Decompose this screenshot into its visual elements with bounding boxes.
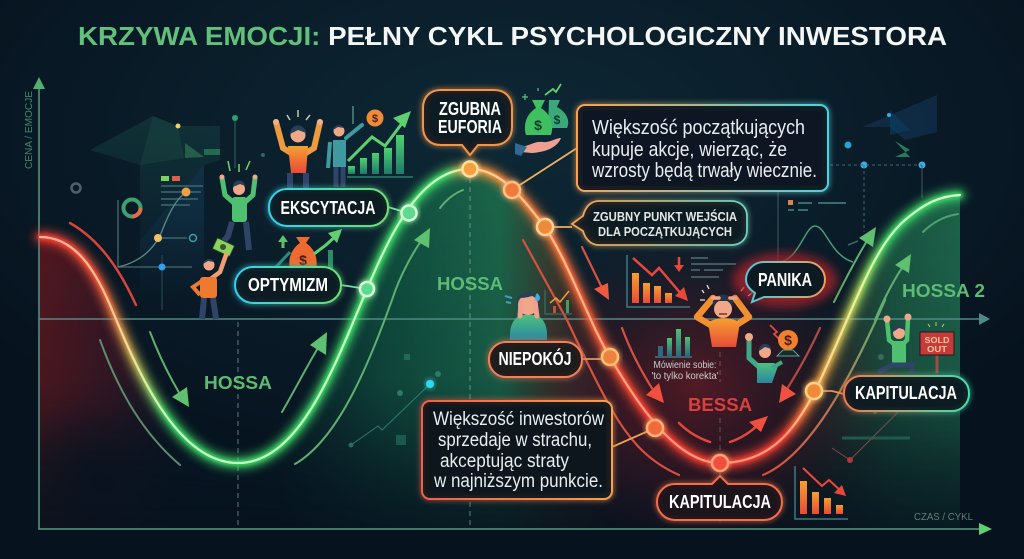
bear market red haze bbox=[510, 230, 880, 540]
label: kapitulacja bottom: KAPITULACJA bbox=[669, 492, 771, 512]
callout: beginners buy: kupuje akcje, wierząc, że bbox=[592, 139, 787, 161]
callout: most investors sell: Większość inwestorów bbox=[433, 409, 604, 430]
axis label: y: CENA / EMOCJE bbox=[24, 91, 35, 169]
callout: most investors sell: sprzedaje w strachu, bbox=[438, 430, 592, 451]
lower-left dark falloff bbox=[2, 402, 198, 558]
icon: investor pointing at growth chart bbox=[328, 106, 413, 187]
phase label: HOSSA 2: HOSSA 2 bbox=[902, 281, 985, 301]
label: panika bbox=[733, 253, 837, 307]
label: ekscytacja bbox=[269, 189, 388, 226]
icon: investor holding banknote bbox=[193, 238, 235, 319]
title: KRZYWA EMOCJI: PEŁNY CYKL PSYCHOLOGICZNY INWESTORA bbox=[78, 21, 947, 51]
label: niepokoj bbox=[489, 342, 582, 377]
icon: money bags in hand: $ bbox=[534, 117, 542, 133]
label: niepokoj: NIEPOKÓJ bbox=[498, 348, 572, 369]
label: kapitulacja right: KAPITULACJA bbox=[855, 383, 957, 403]
callout: beginners buy: wzrosty będą trwały wiecznie. bbox=[591, 160, 817, 182]
icon: money bags in hand bbox=[515, 84, 568, 156]
label: zgubna euforia: EUFORIA bbox=[438, 117, 502, 137]
label: optymizm bbox=[235, 267, 341, 303]
phase label: HOSSA lower: HOSSA bbox=[204, 373, 272, 393]
label: zgubna euforia: ZGUBNA bbox=[439, 99, 501, 119]
icon: money bags in hand: $ bbox=[554, 113, 561, 127]
label: zgubna euforia bbox=[423, 90, 512, 155]
curve nodes bbox=[360, 162, 822, 471]
icon: small bars with self-talk: 'to tylko korekta' bbox=[652, 371, 719, 382]
icon: cheering investor in orange bbox=[273, 110, 323, 188]
emotion curve bbox=[40, 169, 960, 463]
label: zgubny punkt wejscia: DLA POCZĄTKUJĄCYCH bbox=[598, 225, 732, 239]
callout: most investors sell: akceptując straty bbox=[440, 451, 569, 472]
label: optymizm: OPTYMIZM bbox=[248, 275, 328, 295]
icon: bottom falling chart bbox=[795, 466, 848, 519]
decoration: left data backdrop bbox=[72, 115, 265, 310]
callout: most investors sell bbox=[422, 401, 612, 499]
decoration: right data backdrop bbox=[778, 95, 937, 463]
label: zgubny punkt wejscia bbox=[572, 201, 747, 245]
axis label: x: CZAS / CYKL bbox=[914, 512, 973, 523]
icon: investor offering coin on tray: $ bbox=[784, 332, 792, 348]
label: kapitulacja right bbox=[844, 376, 969, 411]
label: zgubny punkt wejscia: ZGUBNY PUNKT WEJŚCIA bbox=[593, 209, 737, 224]
callout: most investors sell: w najniższym punkcie. bbox=[433, 471, 603, 492]
icon: worried investor bbox=[505, 290, 572, 340]
label: ekscytacja: EKSCYTACJA bbox=[280, 198, 376, 218]
icon: kneeling investor and sold-out sign: OUT bbox=[927, 345, 947, 354]
phase label: HOSSA upper: HOSSA bbox=[437, 274, 503, 294]
icon: kneeling investor and sold-out sign: SOLD bbox=[924, 336, 950, 345]
icon: investor pointing at growth chart: $ bbox=[372, 113, 378, 125]
icon: jumping investor with green shirt bbox=[220, 161, 258, 250]
label: panika: PANIKA bbox=[758, 270, 812, 290]
callout: beginners buy bbox=[577, 105, 828, 191]
icon: panicking investor bbox=[697, 285, 752, 347]
icon: money bag with rising arrow bbox=[275, 229, 342, 270]
icon: falling bar chart bbox=[627, 255, 736, 307]
icon: money bag with rising arrow: $ bbox=[299, 252, 307, 268]
icon: investor offering coin on tray bbox=[745, 325, 799, 383]
phase dividers bbox=[238, 178, 720, 527]
phase label: BESSA: BESSA bbox=[688, 395, 752, 415]
secondary arcs and trend arrows bbox=[70, 190, 958, 475]
icon: kneeling investor and sold-out sign bbox=[878, 314, 954, 373]
icon: small bars with self-talk: Mówienie sobie: bbox=[654, 360, 716, 371]
callout: beginners buy: Większość początkujących bbox=[592, 117, 805, 139]
axes bbox=[33, 77, 992, 535]
area under the emotion curve bbox=[40, 169, 960, 529]
connector lines bbox=[341, 148, 844, 447]
icon: small bars with self-talk bbox=[652, 329, 719, 382]
label: kapitulacja bottom bbox=[657, 476, 782, 520]
decoration: rising mini trend bbox=[348, 354, 441, 448]
